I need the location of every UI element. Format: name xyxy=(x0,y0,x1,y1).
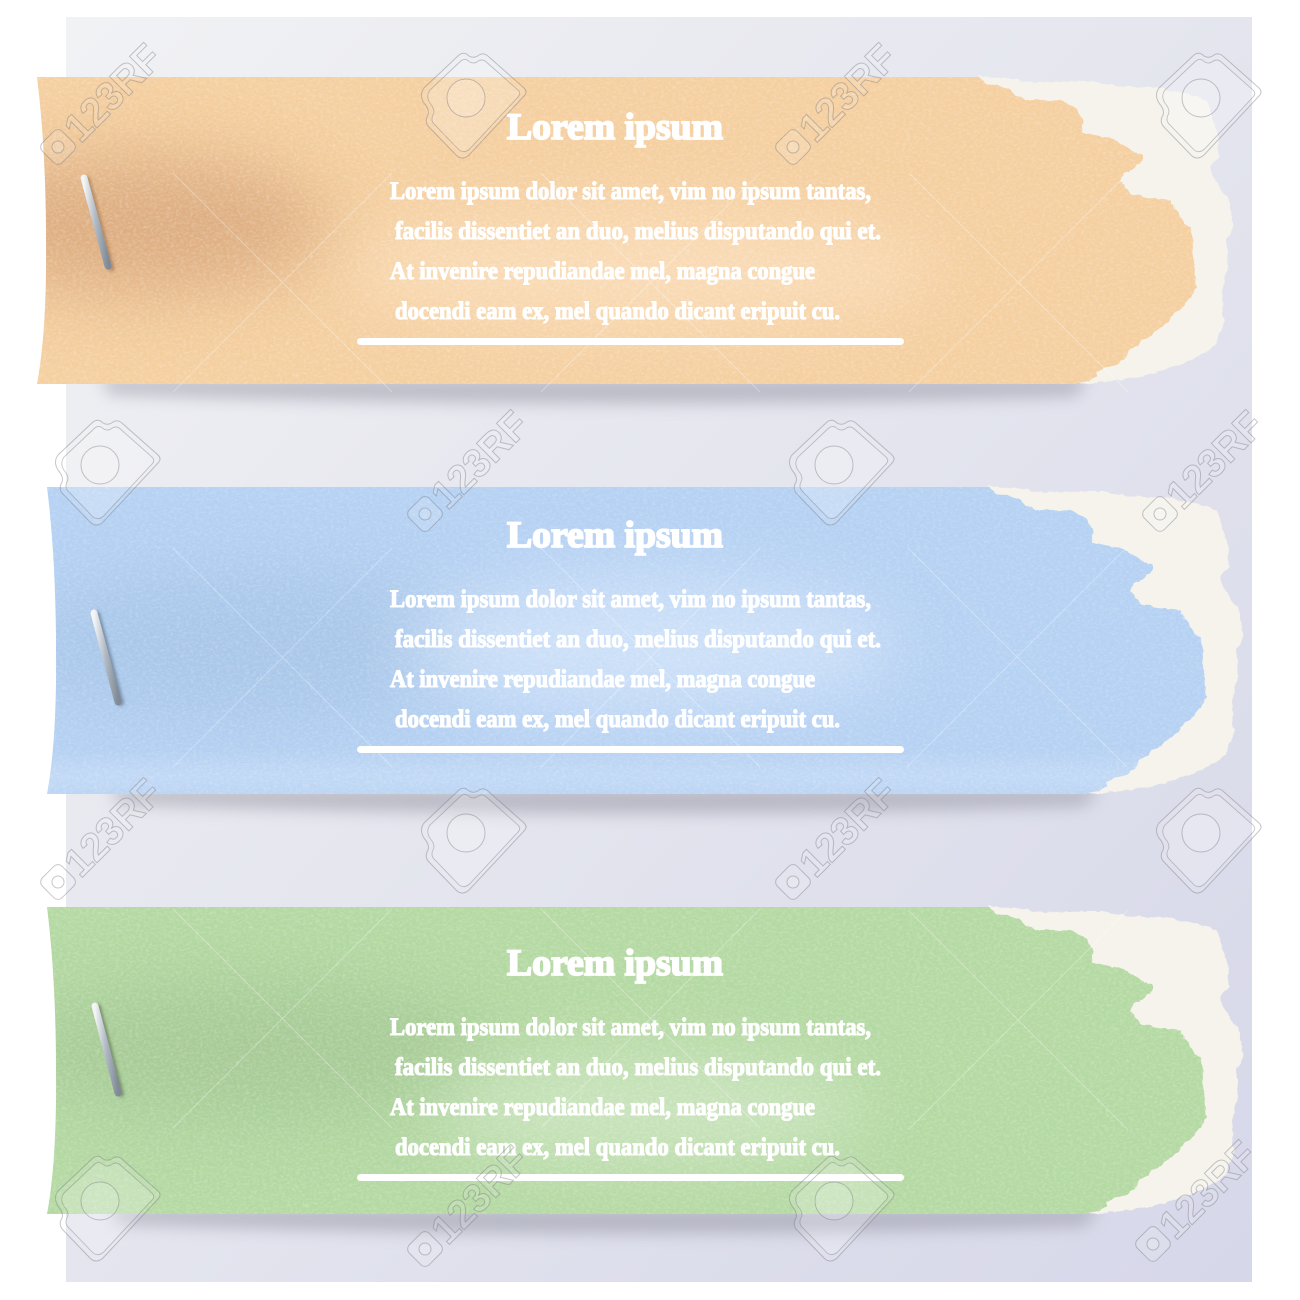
banner 2: blue xyxy=(20,470,1243,814)
banner 2 body text: facilis dissentiet an duo, melius disputando qui et. xyxy=(395,626,881,653)
banner 2 drop shadow xyxy=(110,788,1100,814)
stock watermark overlay: 123RF xyxy=(1158,403,1272,518)
banner 1 drop shadow xyxy=(100,378,1090,404)
banner 3 underline xyxy=(357,1174,904,1181)
banner 1 torn cream backing xyxy=(978,76,1233,384)
banner 3 pin xyxy=(95,1006,121,1094)
stock watermark overlay: 123RF xyxy=(1151,1133,1265,1248)
stock watermark overlay: 123RF xyxy=(791,36,905,151)
banner 2 body text: Lorem ipsum dolor sit amet, vim no ipsum tantas, xyxy=(390,586,871,613)
banner 1 body text: docendi eam ex, mel quando dicant eripuit cu. xyxy=(395,298,840,325)
banner 1 heading: Lorem ipsum xyxy=(507,107,723,148)
stock watermark overlay: 123RF xyxy=(56,771,170,886)
banner 1: orange xyxy=(0,60,1233,404)
banner 3 heading: Lorem ipsum xyxy=(507,943,723,984)
stock watermark overlay: 123RF xyxy=(56,36,170,151)
banner 2 coloured paper xyxy=(47,487,1207,794)
banner 3 coloured paper xyxy=(47,907,1207,1214)
stock watermark overlay: 123RF xyxy=(423,403,537,518)
banner 3 body text: Lorem ipsum dolor sit amet, vim no ipsum tantas, xyxy=(390,1014,871,1041)
banner 1 body text xyxy=(390,178,881,325)
banner 3: green xyxy=(10,890,1243,1234)
stock watermark overlay: 123RF xyxy=(791,771,905,886)
banner 3 body text: At invenire repudiandae mel, magna congue xyxy=(390,1094,815,1121)
banner 3 body text xyxy=(390,1014,881,1161)
banner 1 body text: At invenire repudiandae mel, magna congue xyxy=(390,258,815,285)
stock watermark overlay: 123RF xyxy=(423,1138,537,1253)
banner 2 body text: At invenire repudiandae mel, magna congue xyxy=(390,666,815,693)
banner 2 pin xyxy=(94,613,121,703)
banner 2 underline xyxy=(357,746,904,753)
banner 3 body text: docendi eam ex, mel quando dicant eripuit cu. xyxy=(395,1134,840,1161)
banner 1 coloured paper xyxy=(37,77,1197,384)
banner 1 underline xyxy=(357,338,904,345)
banner 1 body text: facilis dissentiet an duo, melius disputando qui et. xyxy=(395,218,881,245)
banner 1 body text: Lorem ipsum dolor sit amet, vim no ipsum tantas, xyxy=(390,178,871,205)
banner 3 torn cream backing xyxy=(988,906,1243,1214)
banner 2 heading: Lorem ipsum xyxy=(507,515,723,556)
banner 3 body text: facilis dissentiet an duo, melius disputando qui et. xyxy=(395,1054,881,1081)
banner 3 drop shadow xyxy=(110,1208,1100,1234)
banner 2 body text: docendi eam ex, mel quando dicant eripuit cu. xyxy=(395,706,840,733)
banner 2 body text xyxy=(390,586,881,733)
banner 2 torn cream backing xyxy=(988,486,1243,794)
banner 1 pin xyxy=(84,178,111,268)
faint diagonal fold lines xyxy=(173,173,1128,1130)
